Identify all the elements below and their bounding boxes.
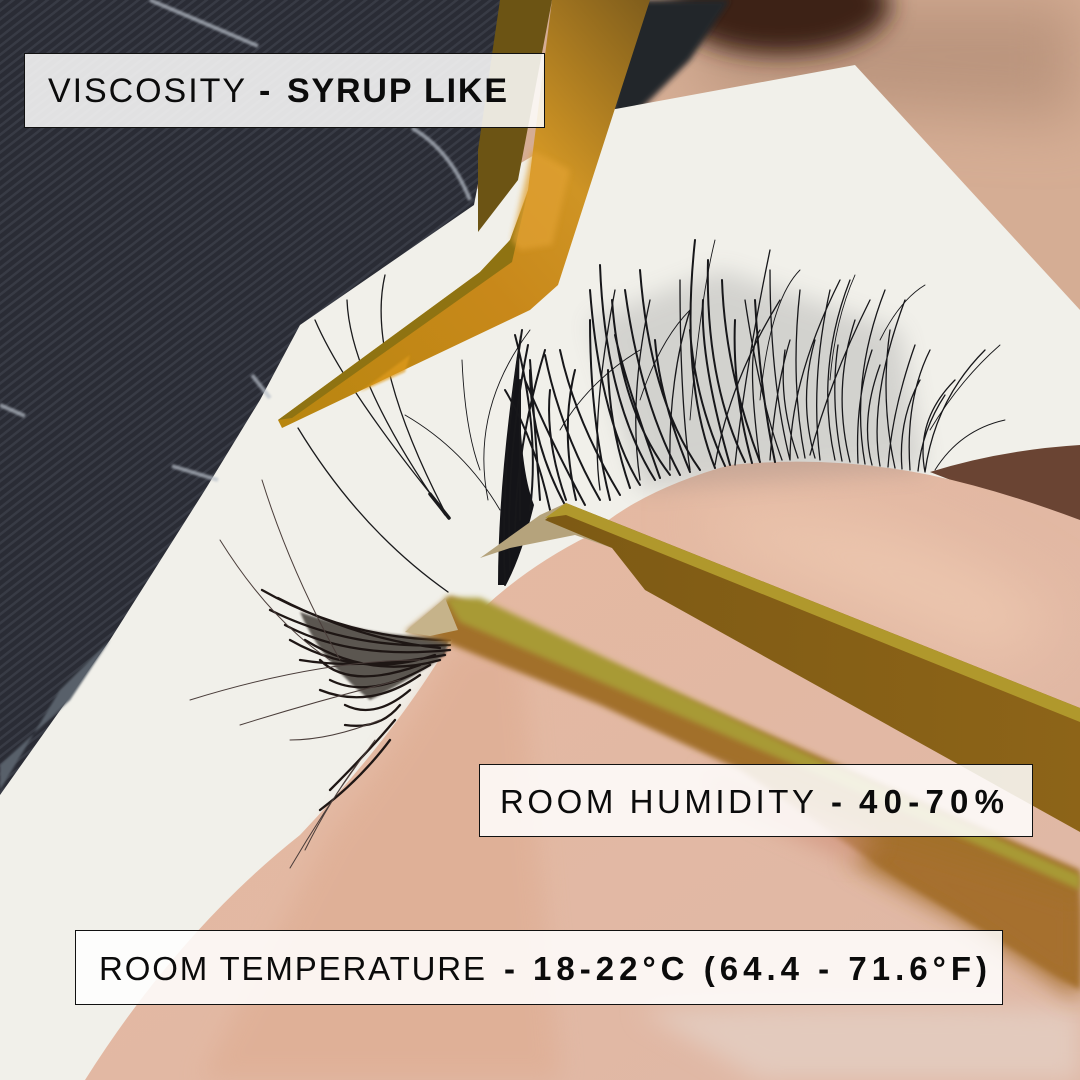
label: room humidity: ROOM HUMIDITY (500, 783, 814, 820)
soft tone beneath the upper lash fan (590, 270, 925, 490)
label: room humidity: 40-70% (859, 783, 1004, 820)
label: room temperature: 18-22°C (64.4 - 71.6°F) (533, 950, 987, 987)
bottom tweezers: upper arm (480, 503, 1080, 832)
bottom tweezers: lower arm (405, 596, 1080, 1000)
label: viscosity (24, 54, 544, 128)
label: room temperature: - (504, 950, 515, 987)
loose lash fan held by tweezers (298, 275, 450, 592)
label: viscosity: SYRUP LIKE (287, 72, 507, 110)
label: viscosity: VISCOSITY (48, 72, 245, 110)
top tweezers (278, 0, 650, 428)
upper lashes (405, 240, 1005, 585)
label: room humidity (480, 764, 1032, 836)
dark patterned fabric (0, 0, 505, 795)
label: viscosity: - (259, 72, 270, 110)
label: room humidity: - (831, 783, 842, 820)
label: room temperature (76, 930, 1002, 1004)
label: room temperature: ROOM TEMPERATURE (99, 950, 485, 987)
eyelid skin and cheek (85, 445, 1080, 1080)
lower lashes (190, 480, 450, 868)
